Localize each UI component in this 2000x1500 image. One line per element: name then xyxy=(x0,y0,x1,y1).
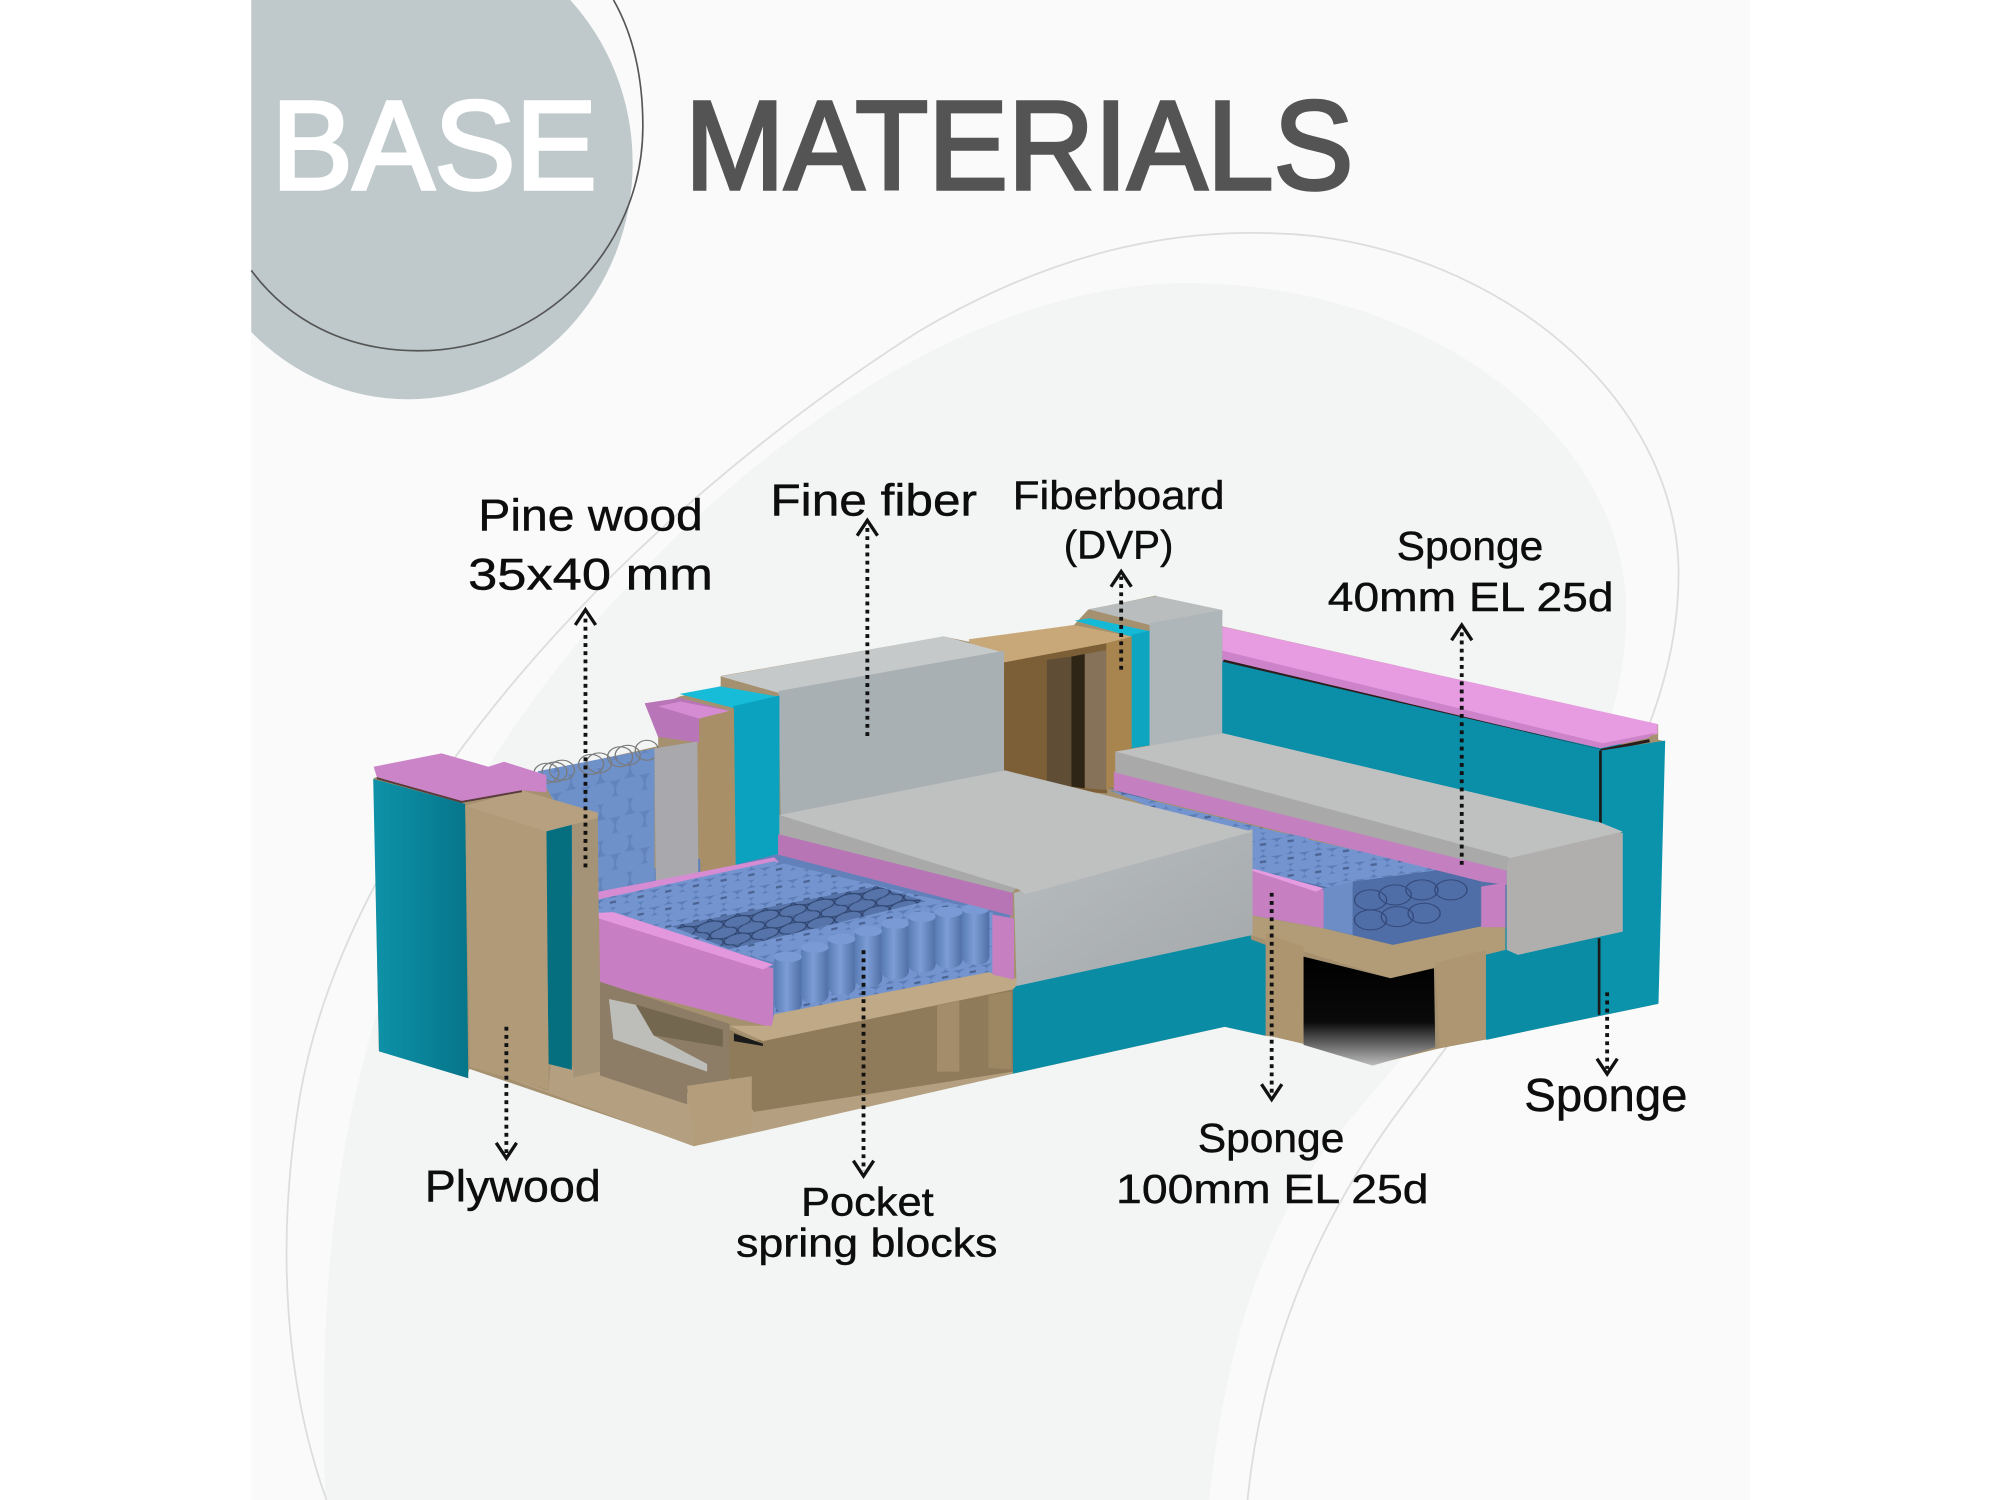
arrow xyxy=(857,520,878,736)
label: 100mm EL 25d xyxy=(1116,1166,1429,1212)
cyan sponge post xyxy=(679,686,779,865)
grey mesh panel xyxy=(654,741,698,884)
cabinet frame post right xyxy=(988,991,1012,1070)
wood post xyxy=(697,708,736,873)
label xyxy=(468,492,713,599)
arrow and label: sponge 40mm xyxy=(1328,523,1614,865)
plywood top xyxy=(465,790,598,831)
label: Fiberboard xyxy=(1013,474,1224,518)
wood leg left xyxy=(1266,933,1304,1044)
centre seat side xyxy=(1014,829,1253,986)
left teal block xyxy=(373,779,468,1078)
lift mechanism xyxy=(609,999,723,1072)
wall spring block xyxy=(534,740,658,898)
black seam xyxy=(1599,751,1600,1015)
background blob xyxy=(324,283,1626,1500)
wood tray xyxy=(1250,915,1505,978)
cyan sponge strip xyxy=(1075,618,1152,748)
under-seat compartment xyxy=(600,982,729,1104)
pine post xyxy=(572,815,600,1077)
fiberboard frame xyxy=(969,625,1132,793)
exposed coils xyxy=(671,886,926,949)
grey fiber back xyxy=(721,636,1004,819)
label: Sponge xyxy=(1397,523,1543,569)
label: Fine fiber xyxy=(770,476,977,525)
seat plank xyxy=(729,972,1022,1041)
left back pink xyxy=(569,857,781,901)
plywood front panel xyxy=(465,806,549,1090)
spring cylinders xyxy=(774,904,989,1012)
arrow xyxy=(496,1027,517,1158)
right springs xyxy=(1107,787,1507,947)
teal under centre xyxy=(1011,938,1266,1073)
label: (DVP) xyxy=(1064,524,1173,568)
dark slot xyxy=(734,1033,763,1046)
arrow and label: fiberboard xyxy=(1013,474,1224,670)
teal backing under centre xyxy=(1011,931,1265,1074)
arrow and label: fine fiber xyxy=(770,476,977,736)
spring bed tops xyxy=(598,861,993,1018)
pink front board xyxy=(598,912,773,1028)
right inner pink xyxy=(1114,772,1507,885)
pink top strip xyxy=(1222,627,1658,751)
small wood block xyxy=(687,1076,752,1146)
arrow and label: plywood xyxy=(425,1027,601,1212)
bed backing xyxy=(599,842,1010,1027)
title word: BASE: BASE xyxy=(272,75,597,216)
right section: rear parts xyxy=(969,596,1665,1073)
centre seat front strip xyxy=(779,815,1020,895)
teal back wall xyxy=(1222,662,1600,827)
sofa backing silhouette xyxy=(374,596,1665,1145)
label: spring blocks xyxy=(736,1221,997,1265)
left section xyxy=(373,636,1022,1146)
centre pink strip xyxy=(778,834,1013,916)
label: 35x40 mm xyxy=(468,550,713,599)
page background xyxy=(251,0,1750,1500)
title xyxy=(272,75,1353,216)
right seat top xyxy=(1115,733,1623,858)
arrow xyxy=(1452,625,1472,865)
arrow and label: pine wood xyxy=(468,492,713,867)
background outline curve xyxy=(287,233,1679,1500)
arrow xyxy=(575,610,596,867)
left pink foam top xyxy=(374,753,546,802)
arrow xyxy=(1597,992,1617,1074)
header circle outline xyxy=(251,0,643,351)
sofa cross-section xyxy=(373,596,1665,1146)
centre seat top xyxy=(779,770,1253,894)
teal lower right xyxy=(1487,933,1600,1040)
rear pink foam xyxy=(645,698,729,743)
teal slit xyxy=(546,825,572,1070)
label xyxy=(1013,474,1224,568)
title word: MATERIALS: MATERIALS xyxy=(685,75,1353,216)
header circle xyxy=(251,0,633,400)
label: Sponge xyxy=(1524,1069,1687,1121)
arrow xyxy=(1261,893,1282,1099)
label: Plywood xyxy=(425,1163,601,1212)
cabinet frame post xyxy=(937,1001,959,1072)
right pink board near xyxy=(1248,869,1505,928)
right seat grey end xyxy=(1507,822,1623,955)
arrow xyxy=(1111,571,1131,670)
label xyxy=(736,1181,997,1265)
centre pink side xyxy=(992,915,1014,980)
cabinet front xyxy=(729,986,1013,1112)
arrow and label: sponge xyxy=(1524,992,1688,1121)
label xyxy=(1116,1115,1429,1212)
floor plywood xyxy=(470,1058,1013,1146)
centre seat xyxy=(778,770,1253,986)
teal right side xyxy=(1600,741,1665,1015)
teal backing at right xyxy=(1222,657,1658,1040)
label: Pocket xyxy=(801,1181,934,1225)
arrow and label: pocket spring blocks xyxy=(736,950,997,1265)
label: Pine wood xyxy=(478,492,703,541)
arrow and label: sponge 100mm xyxy=(1116,893,1429,1212)
label xyxy=(1328,523,1614,620)
grey fiber post xyxy=(1088,596,1222,747)
label: 40mm EL 25d xyxy=(1328,574,1614,620)
wood leg right xyxy=(1435,950,1486,1048)
right seat front xyxy=(1115,752,1509,871)
dark opening xyxy=(1304,957,1435,1066)
label: Sponge xyxy=(1198,1115,1344,1161)
arrow xyxy=(853,950,874,1176)
